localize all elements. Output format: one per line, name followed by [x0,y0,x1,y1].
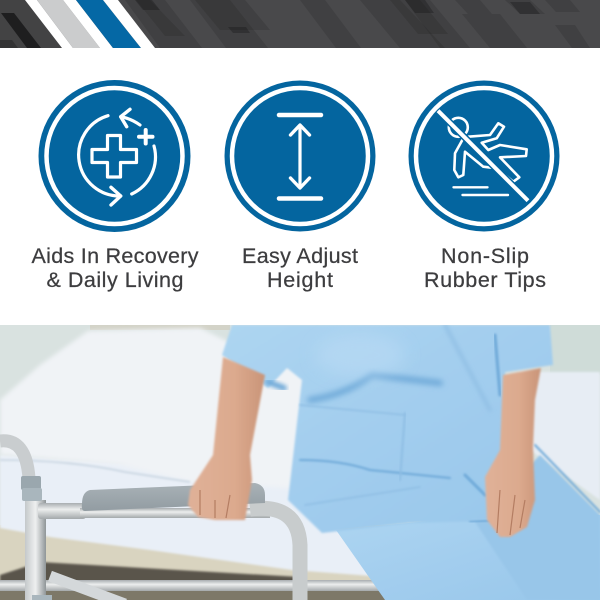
caption: easy adjust height [242,244,358,292]
caption: aids in recovery: Aids In Recovery [32,244,199,268]
caption: aids in recovery [32,244,199,292]
caption: easy adjust height: Easy Adjust [242,244,358,268]
photo: patient on hospital bed with walker [0,325,600,600]
gown [222,325,553,533]
left arm and hand [188,357,265,520]
icon: no slip figure [408,80,560,232]
room background [0,325,600,600]
caption: non-slip rubber tips: Non-Slip [441,244,529,268]
header banner [0,0,600,48]
pillow [0,328,320,490]
bed and frame [0,525,385,600]
gown highlight [315,333,405,377]
caption: easy adjust height: Height [267,268,333,292]
walker grip [82,483,265,511]
gown folds [268,325,600,522]
walker [0,441,300,600]
pants [336,515,600,600]
caption: non-slip rubber tips [424,244,546,292]
icon: recovery cycle with medical cross [38,80,190,232]
icon: adjustable height arrow [224,80,376,232]
caption: aids in recovery: & Daily Living [46,268,184,292]
mattress [0,372,600,576]
right arm and hand [485,368,541,537]
caption: non-slip rubber tips: Rubber Tips [424,268,546,292]
